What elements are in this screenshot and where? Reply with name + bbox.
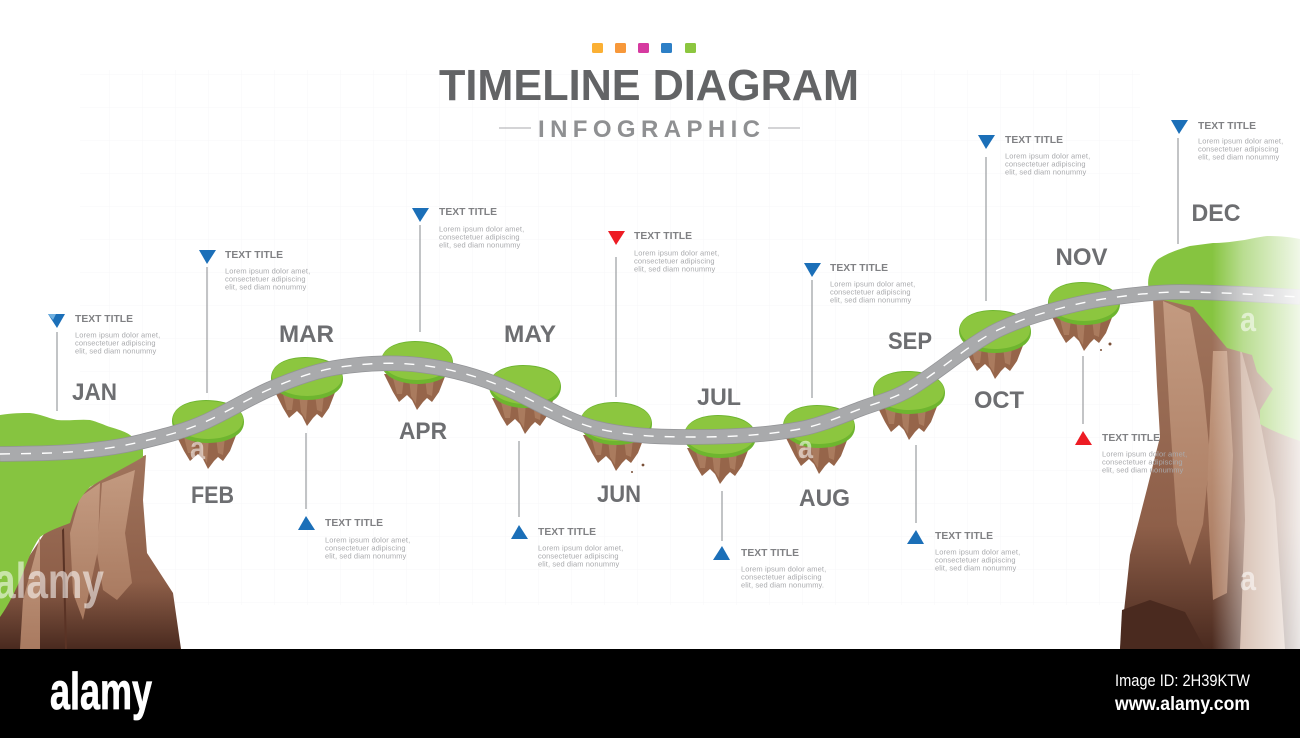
month: FEB: FEB [191,482,234,509]
month: OCT: OCT [974,387,1024,414]
marker: SEP: Lorem ipsum dolor amet, [935,548,1020,556]
marker: JUL: elit, sed diam nonummy. [741,580,824,590]
marker: MAR [298,433,410,560]
marker: JUL: consectetuer adipiscing [741,572,822,582]
island: MAY [489,365,561,434]
falling debris [631,342,1112,473]
colour squares [592,43,696,53]
marker: SEP [907,445,1020,572]
marker: MAR: consectetuer adipiscing [325,544,406,552]
marker: NOV: elit, sed diam nonummy [1102,466,1184,474]
left cliff [0,413,181,649]
marker: JUN: elit, sed diam nonummy [634,264,716,274]
island: NOV [1048,282,1120,351]
marker: MAY: TEXT TITLE [538,526,596,538]
background grid [80,70,1140,605]
marker: JAN: consectetuer adipiscing [75,338,156,348]
marker: AUG: Lorem ipsum dolor amet, [830,280,915,288]
marker: JUL: TEXT TITLE [741,547,799,559]
marker: FEB: Lorem ipsum dolor amet, [225,266,310,276]
marker: JAN: TEXT TITLE [75,313,133,325]
marker: SEP: TEXT TITLE [935,530,993,542]
month: SEP: SEP [888,328,932,355]
month: JUL: JUL [697,384,741,411]
marker: SEP: elit, sed diam nonummy [935,564,1017,572]
marker: MAY: consectetuer adipiscing [538,552,619,560]
marker: OCT: TEXT TITLE [1005,134,1063,146]
island: OCT [959,310,1031,379]
watermark: a [1240,301,1257,339]
marker: SEP: consectetuer adipiscing [935,556,1016,564]
marker: OCT: elit, sed diam nonummy [1005,168,1087,176]
island: FEB [172,400,244,469]
month: DEC: DEC [1192,200,1240,227]
marker: NOV: consectetuer adipiscing [1102,458,1183,466]
watermark [0,301,1257,609]
marker: OCT: Lorem ipsum dolor amet, [1005,152,1090,160]
footer bar [0,649,1300,738]
marker: FEB: consectetuer adipiscing [225,274,306,284]
island: JUN [580,402,652,471]
month: MAR: MAR [279,321,334,348]
marker: JAN [48,313,160,411]
marker: JUN: Lorem ipsum dolor amet, [634,248,719,258]
watermark: a [798,429,813,465]
marker: FEB: TEXT TITLE [225,249,283,261]
marker: FEB [199,249,310,393]
marker: MAR: elit, sed diam nonummy [325,552,407,560]
marker: FEB: elit, sed diam nonummy [225,282,307,292]
road [0,292,1300,454]
month: MAY: MAY [504,321,556,348]
marker: APR: elit, sed diam nonummy [439,240,521,250]
month: NOV: NOV [1056,244,1108,271]
marker: OCT: consectetuer adipiscing [1005,160,1086,168]
right cliff grass [1148,236,1300,441]
marker: JUN: consectetuer adipiscing [634,256,715,266]
marker: JUN: TEXT TITLE [634,230,692,242]
marker: AUG: TEXT TITLE [830,262,888,274]
marker: APR: Lorem ipsum dolor amet, [439,224,524,234]
marker: MAY: Lorem ipsum dolor amet, [538,544,623,552]
footer logo: alamy [50,663,152,721]
right side white fade [1212,225,1300,649]
island: APR [381,341,453,410]
marker: JUL: Lorem ipsum dolor amet, [741,564,826,574]
website: www.alamy.com [1114,694,1250,715]
marker: AUG [804,262,915,398]
title: TIMELINE DIAGRAM [439,61,859,110]
right cliff rock [1120,298,1300,649]
marker: OCT [978,134,1090,301]
marker: AUG: consectetuer adipiscing [830,288,911,296]
marker: DEC: consectetuer adipiscing [1198,144,1279,154]
island: JUL [684,415,756,484]
marker: JUL [713,491,826,590]
marker: JAN: elit, sed diam nonummy [75,346,157,356]
marker: NOV: TEXT TITLE [1102,432,1160,444]
subtitle: INFOGRAPHIC [538,116,760,143]
marker: APR [412,206,524,332]
marker: NOV: Lorem ipsum dolor amet, [1102,450,1187,458]
month: JUN: JUN [597,481,641,508]
image id: Image ID: 2H39KTW [1115,671,1250,690]
month: JAN: JAN [72,379,117,406]
watermark: a [1240,560,1257,598]
watermark: a [190,430,205,466]
marker: NOV [1075,356,1187,474]
marker: JAN: Lorem ipsum dolor amet, [75,330,160,340]
marker: DEC: TEXT TITLE [1198,120,1256,132]
left cliff grass [0,413,143,617]
left cliff rock [0,455,181,649]
island: SEP [873,371,945,440]
month: APR: APR [399,418,447,445]
marker: MAY: elit, sed diam nonummy [538,560,620,568]
marker: JUN [608,230,719,397]
marker: APR: consectetuer adipiscing [439,232,520,242]
marker: DEC: elit, sed diam nonummy [1198,152,1280,162]
marker: MAY [511,441,623,568]
marker: MAR: TEXT TITLE [325,517,383,529]
marker: APR: TEXT TITLE [439,206,497,218]
island: AUG [783,405,855,474]
marker: DEC: Lorem ipsum dolor amet, [1198,136,1283,146]
right cliff [1120,236,1300,649]
marker: AUG: elit, sed diam nonummy [830,296,912,304]
island: MAR [271,357,343,426]
marker: DEC [1171,120,1283,244]
month: AUG: AUG [799,485,850,512]
marker: MAR: Lorem ipsum dolor amet, [325,536,410,544]
